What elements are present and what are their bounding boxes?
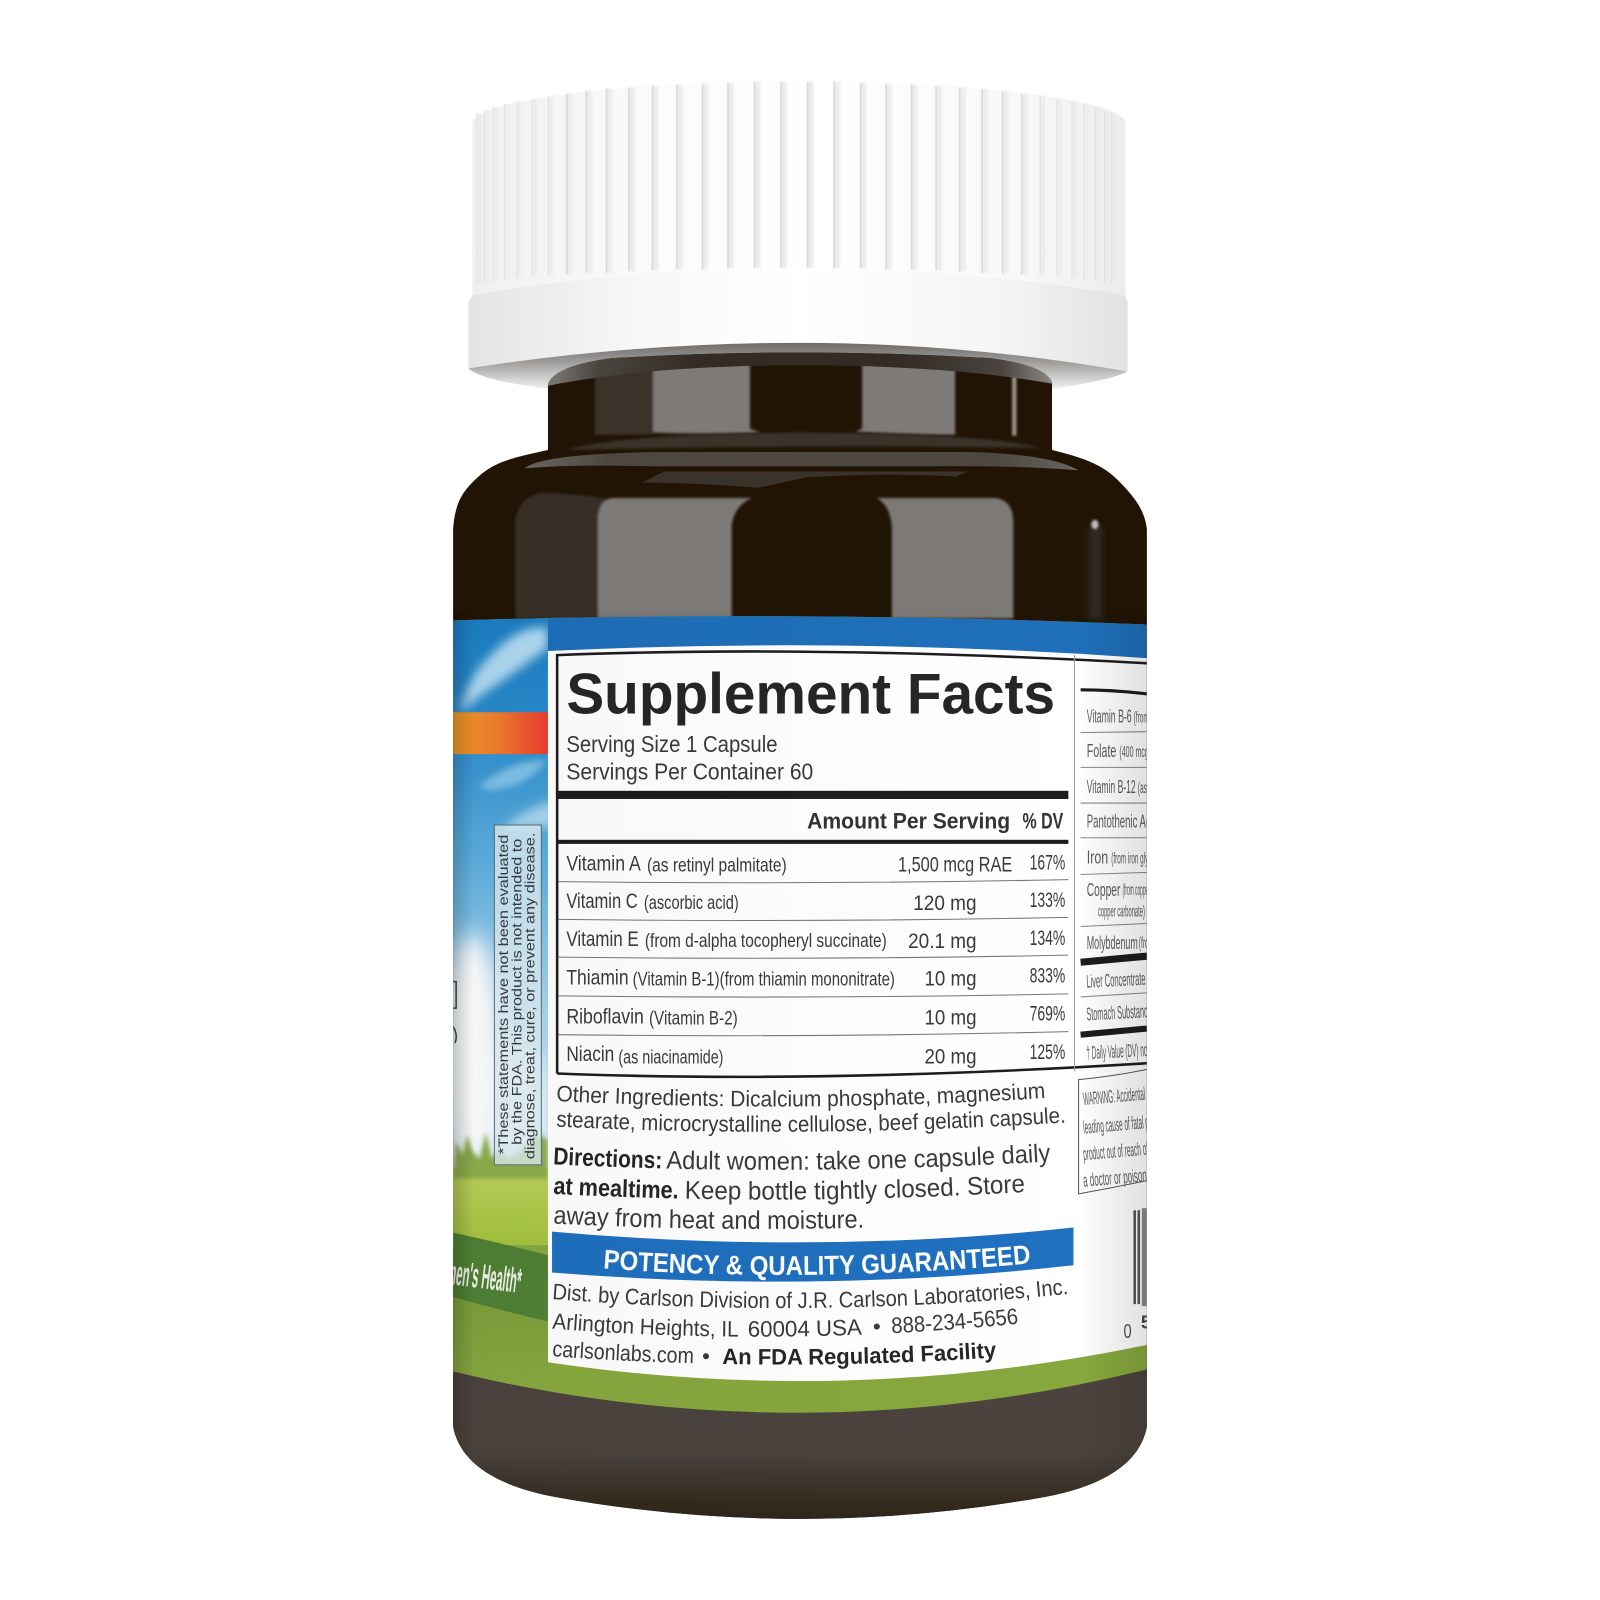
- olive stripe: [453, 1297, 530, 1388]
- rib lines: [477, 82, 1112, 285]
- serving info: Serving Size 1 Capsule: [566, 731, 778, 757]
- directions: [554, 1144, 1050, 1231]
- grass and trees: [453, 1133, 548, 1245]
- neck collar: [548, 352, 1052, 386]
- directions: away from heat and moisture.: [554, 1208, 862, 1231]
- side table, continuation: (from sodium): [1139, 935, 1180, 952]
- side table, continuation: Pantothenic Acid: [1087, 811, 1158, 832]
- row: vitamin A: 167%: [1030, 850, 1065, 874]
- row: riboflavin: [568, 1006, 1065, 1029]
- row: vitamin A: (as retinyl palmitate): [647, 854, 787, 876]
- row: niacin: Niacin: [566, 1042, 614, 1066]
- bottle product illustration: (as cyanocobalamin): [1138, 780, 1199, 797]
- row: vitamin C: [566, 892, 1065, 914]
- row: riboflavin: Riboflavin: [566, 1004, 644, 1028]
- sky panel: [453, 618, 548, 1245]
- row: vitamin C: 120 mg: [913, 891, 977, 915]
- edge shading: [453, 612, 1147, 1531]
- table frame: [557, 651, 1147, 1073]
- row: riboflavin: 10 mg: [924, 1005, 977, 1029]
- distributor info: Arlington Heights, IL: [552, 1314, 738, 1340]
- side table, continuation: Stomach Substance: [1086, 1000, 1152, 1024]
- row: vitamin E: Vitamin E: [566, 927, 639, 951]
- row: niacin: 20 mg: [924, 1044, 977, 1068]
- directions: Directions:: [554, 1147, 660, 1168]
- column headers: Amount Per Serving: [807, 809, 1010, 834]
- row: thiamin: (Vitamin B-1)(from thiamin mononitrate): [633, 969, 895, 991]
- row: vitamin E: 20.1 mg: [908, 929, 977, 953]
- product label: [453, 612, 1147, 1450]
- guarantee banner: POTENCY & QUALITY GUARANTEED: [604, 1246, 1030, 1280]
- bottle product illustration: (from pyridoxine HCl): [1134, 709, 1195, 726]
- side table, continuation: Folate: [1087, 740, 1116, 761]
- distributor info: 888-234-5656: [892, 1308, 1018, 1334]
- other ingredients: [556, 1084, 1064, 1136]
- barcode: [1124, 1208, 1147, 1338]
- row: riboflavin: (Vitamin B-2): [649, 1007, 738, 1029]
- distributor info: carlsonlabs.com: [553, 1342, 693, 1364]
- directions: at mealtime.: [554, 1178, 677, 1198]
- side table, continuation: Copper: [1087, 879, 1120, 900]
- rib shading: [480, 82, 1114, 285]
- heading: Supplement Facts: [566, 662, 1055, 726]
- orange stripe: [453, 712, 548, 754]
- bottle product illustration: product out of reach of children: [1082, 1135, 1173, 1164]
- row: vitamin A: 1,500 mcg RAE: [898, 852, 1012, 876]
- other ingredients: stearate, microcrystalline cellulose, beef gelatin capsule.: [556, 1107, 1064, 1136]
- distributor info: •: [874, 1324, 880, 1330]
- other ingredients: Other Ingredients: Dicalcium phosphate, magnesium: [558, 1084, 1044, 1111]
- row: vitamin E: [566, 930, 1065, 952]
- row: vitamin E: 134%: [1030, 926, 1065, 950]
- neck reflections: [595, 359, 1016, 436]
- distributor info: Dist. by Carlson Division of J.R. Carlson Laboratories, Inc.: [554, 1281, 1067, 1308]
- guarantee banner: [552, 1228, 1074, 1282]
- row: niacin: [568, 1044, 1065, 1068]
- bottle product illustration: † Daily Value (DV) not established: [1086, 1037, 1184, 1063]
- distributor info: [552, 1281, 1067, 1369]
- bottle glass body: [449, 347, 1153, 1541]
- FDA disclaimer box: *These statements have not been evaluated: [496, 835, 512, 1154]
- side table, continuation: (from iron glycinate): [1111, 850, 1167, 867]
- bottle product illustration: (from copper gluconate,: [1122, 882, 1173, 899]
- distributor info: •: [703, 1353, 709, 1360]
- row: vitamin E: (from d-alpha tocopheryl succinate): [645, 930, 887, 952]
- barcode: 0: [1123, 1321, 1132, 1343]
- FDA disclaimer box: diagnose, treat, cure, or prevent any disease.: [523, 833, 539, 1159]
- partial front-label marks: [453, 982, 456, 1043]
- serving info: [566, 731, 813, 785]
- serving info: Servings Per Container 60: [566, 759, 813, 785]
- row: vitamin A: Vitamin A: [566, 851, 641, 875]
- bottle product illustration: leading cause of fatal poisoning: [1082, 1109, 1173, 1138]
- bottle base: [453, 1370, 1147, 1519]
- product label: men's Health*: [444, 1254, 524, 1301]
- white panel: [548, 645, 1147, 1381]
- row: thiamin: 10 mg: [924, 967, 977, 991]
- barcode: 5: [1141, 1312, 1151, 1333]
- top blue band: [548, 616, 1147, 668]
- warning box: [1078, 1069, 1147, 1194]
- side table, continuation: Vitamin B-6: [1087, 705, 1132, 726]
- row: niacin: 125%: [1030, 1040, 1065, 1064]
- row: riboflavin: 769%: [1030, 1001, 1065, 1025]
- side table, continuation: Liver Concentrate: [1086, 968, 1146, 992]
- row: vitamin C: 133%: [1030, 888, 1065, 912]
- side table, continuation: Molybdenum: [1087, 932, 1138, 953]
- specular dot: [1089, 520, 1102, 619]
- side table, continuation: [1080, 688, 1147, 1062]
- side table, continuation: Iron: [1087, 846, 1108, 867]
- row: vitamin C: Vitamin C: [566, 889, 638, 913]
- row: niacin: (as niacinamide): [618, 1046, 723, 1068]
- row: thiamin: 833%: [1030, 964, 1065, 988]
- white ribbed cap: [468, 82, 1128, 389]
- shoulder reflections: [515, 493, 1013, 618]
- directions: Adult women: take one capsule daily: [666, 1144, 1050, 1172]
- row: vitamin C: (ascorbic acid): [644, 892, 739, 914]
- FDA disclaimer box: [494, 825, 541, 1165]
- column headers: [808, 812, 1064, 833]
- side table, continuation: (400 mcg folic acid): [1119, 744, 1181, 761]
- column headers: % DV: [1022, 809, 1064, 834]
- side table, continuation: copper carbonate): [1098, 903, 1145, 920]
- side table, continuation: Vitamin B-12: [1087, 776, 1136, 797]
- shoulder rings: [524, 433, 1079, 488]
- directions: Keep bottle tightly closed. Store: [686, 1176, 1024, 1205]
- FDA disclaimer box: by the FDA. This product is not intended to: [509, 839, 525, 1145]
- ribbed section: [472, 82, 1126, 306]
- distributor info: 60004 USA: [748, 1319, 862, 1337]
- cap band: [468, 268, 1128, 371]
- supplement facts table: [557, 651, 1147, 1077]
- bottle product illustration: WARNING: Accidental overdose: [1082, 1080, 1173, 1109]
- row: thiamin: Thiamin: [566, 966, 629, 990]
- row: vitamin A: [566, 855, 1065, 876]
- row: thiamin: [566, 968, 1065, 990]
- product label: a doctor or poison control: [1082, 1162, 1173, 1191]
- label back colour: [449, 607, 1153, 1464]
- distributor info: An FDA Regulated Facility: [722, 1342, 996, 1369]
- cap lip underside: [468, 343, 1128, 389]
- dark green stripe: [453, 1233, 548, 1321]
- bottle product illustration: [453, 82, 1147, 1519]
